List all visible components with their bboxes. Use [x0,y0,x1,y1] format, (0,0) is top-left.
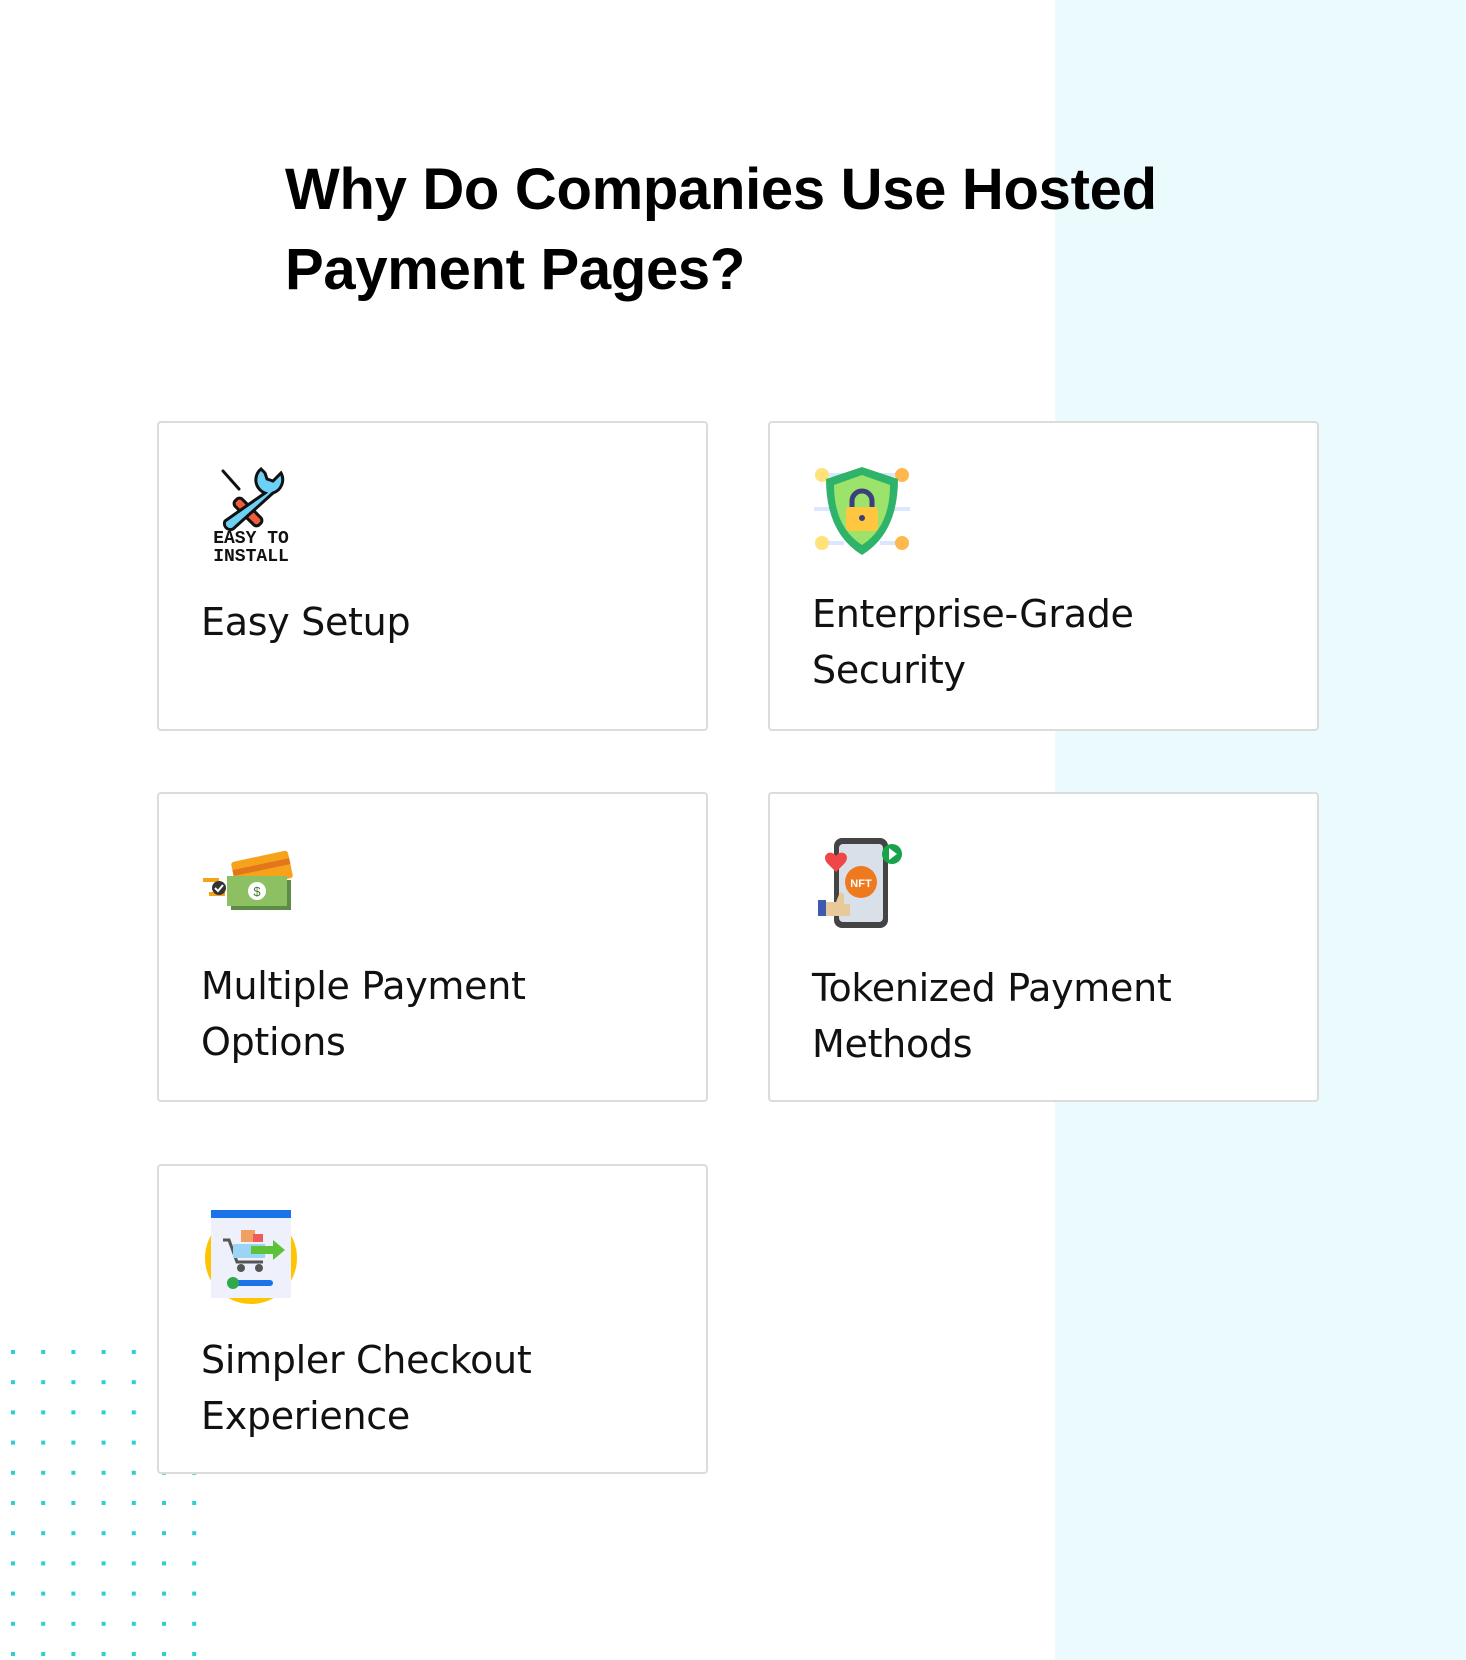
panel: tokenized [768,792,1319,1102]
icon: shield lock [814,467,910,555]
text [812,966,1171,1066]
panel: security [768,421,1319,731]
text [812,592,1134,692]
panel: easy setup [157,421,708,731]
panel: multiple payment options [157,792,708,1102]
text [201,964,526,1064]
icon: NFT phone [818,838,902,928]
icon: tools easy to install: EASY TO [213,529,289,549]
text: Multiple Payment [201,964,526,1008]
text [201,1338,531,1438]
title [285,157,1157,302]
text: Easy Setup [201,600,410,644]
panel: simpler checkout [157,1164,708,1474]
icon: checkout cart [205,1210,297,1304]
title: Payment Pages? [285,237,745,302]
text: Options [201,1020,346,1064]
decorative dots pattern [11,1350,196,1656]
icon: NFT phone: NFT [850,878,872,890]
icon: cash and card [203,850,293,910]
text: Simpler Checkout [201,1338,531,1382]
text: Experience [201,1394,410,1438]
text: Tokenized Payment [812,966,1171,1010]
text: Security [812,648,966,692]
icon: tools easy to install [213,467,289,563]
text: Methods [812,1022,972,1066]
icon: cash and card: $ [253,884,261,899]
text: Enterprise-Grade [812,592,1134,636]
title: Why Do Companies Use Hosted [285,157,1157,222]
